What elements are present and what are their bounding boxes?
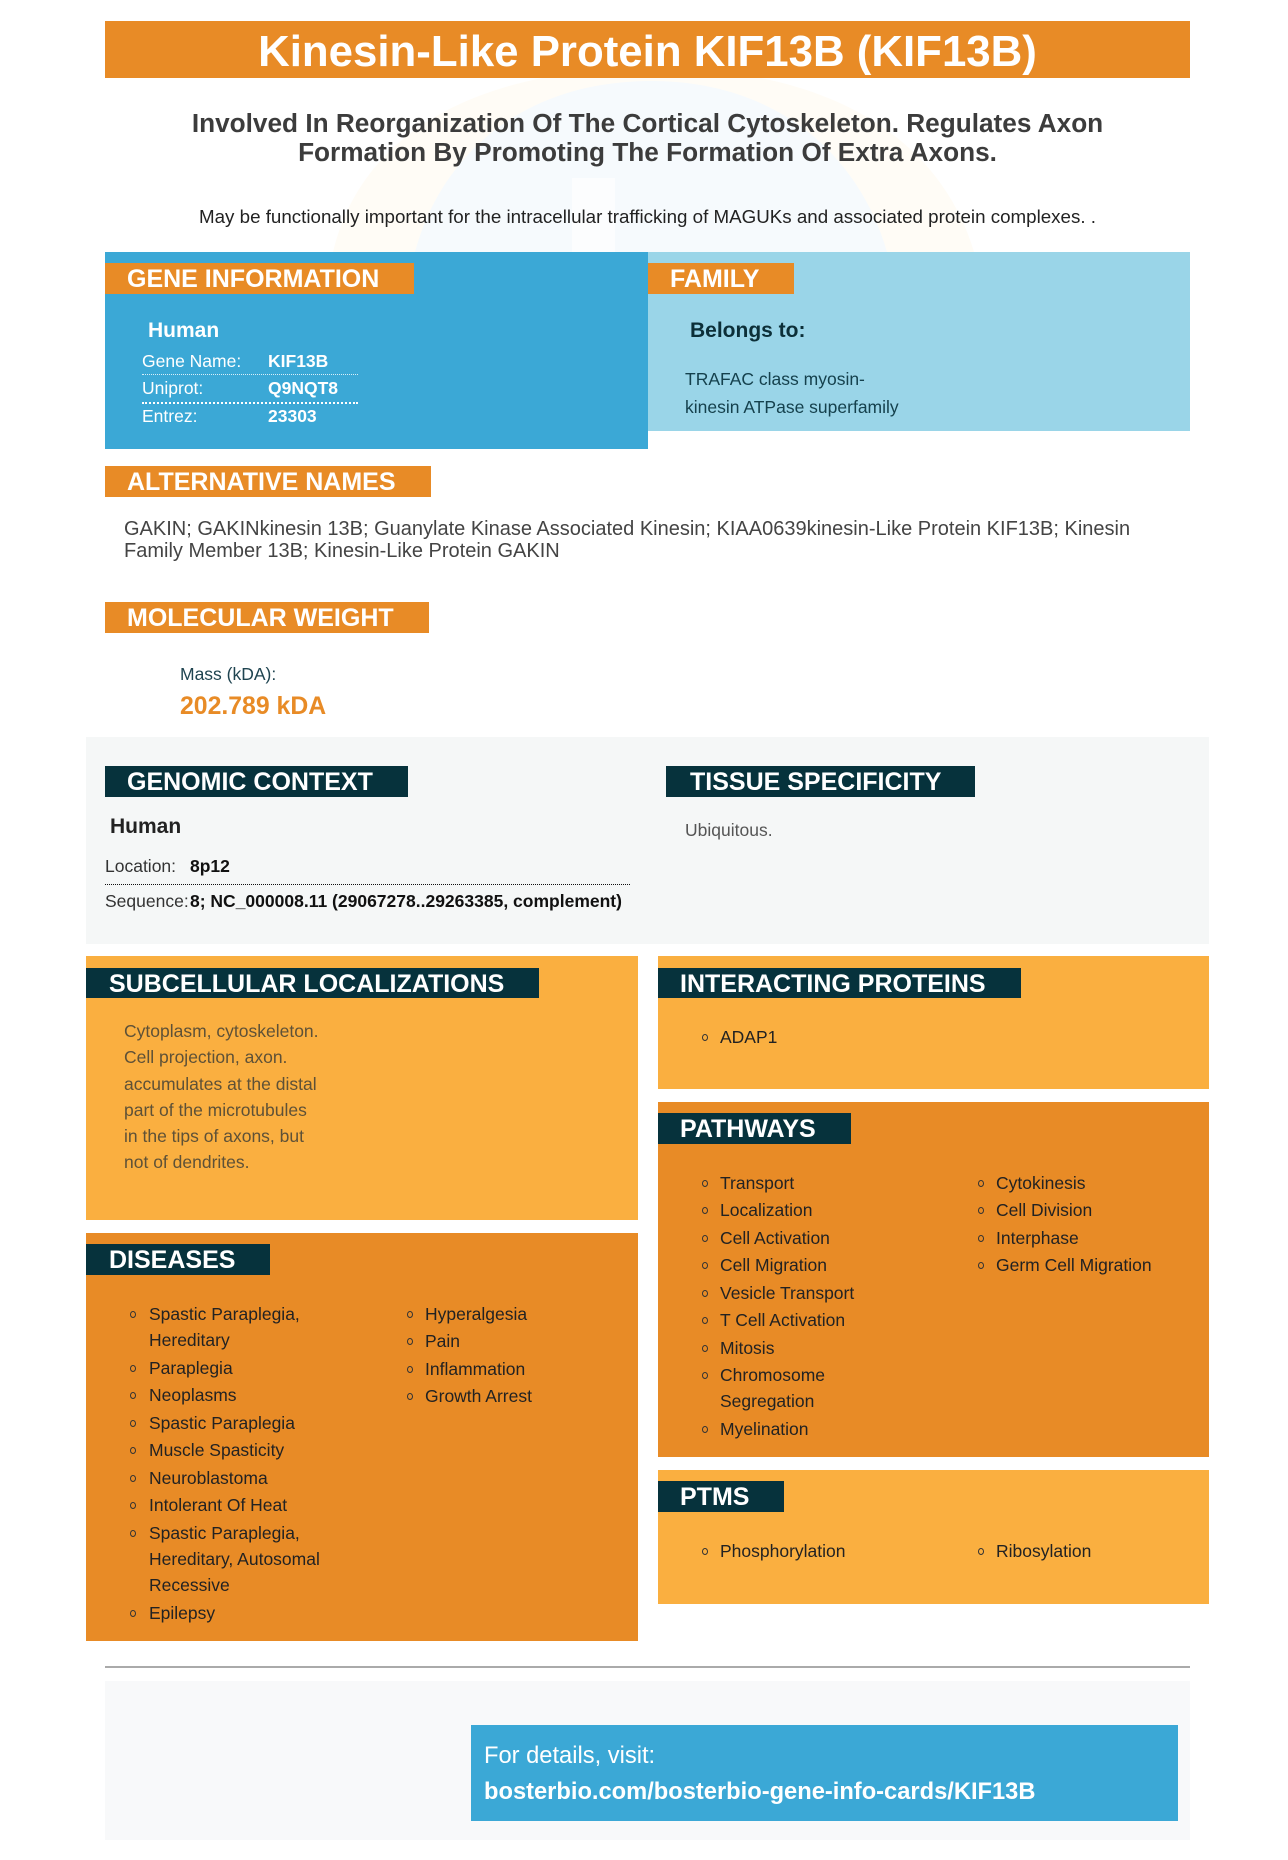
panel: family	[648, 252, 1190, 431]
heading: tissue specificity: TISSUE SPECIFICITY	[690, 768, 941, 796]
call to action text: bosterbio.com/bosterbio-gene-info-cards/KIF13B	[484, 1779, 1035, 1805]
heading: ptms: PTMS	[680, 1483, 749, 1511]
heading: gene information: GENE INFORMATION	[127, 265, 379, 293]
pathways list column 2: Cell Division	[996, 1200, 1092, 1220]
pathways list column 1: Cell Activation	[720, 1228, 830, 1248]
alternative names text: GAKIN; GAKINkinesin 13B; Guanylate Kinase Associated Kinesin; KIAA0639kinesin-Like Protein KIF13B; Kinesin	[124, 518, 1130, 540]
disease list column 1: Spastic Paraplegia,	[149, 1304, 300, 1324]
tissue specificity text: Ubiquitous.	[685, 820, 773, 840]
panel: interacting proteins	[658, 956, 1209, 1089]
localization text: part of the microtubules	[124, 1100, 307, 1120]
heading: family	[648, 263, 794, 294]
gene name row	[142, 351, 328, 371]
disease list column 1: Recessive	[149, 1575, 230, 1595]
panel: diseases: Growth Arrest	[425, 1386, 532, 1406]
disease list column 1	[130, 1304, 320, 1623]
uniprot row: Uniprot:	[142, 378, 203, 398]
mass label: Mass (kDA):	[180, 664, 276, 684]
pathways list column 1: Transport	[720, 1173, 794, 1193]
heading: alternative names: ALTERNATIVE NAMES	[127, 468, 396, 496]
disease list column 1: Paraplegia	[149, 1358, 233, 1378]
localization text	[124, 1021, 319, 1172]
disease list column 1: Intolerant Of Heat	[149, 1495, 287, 1515]
sequence row: Sequence:	[105, 891, 189, 911]
heading: ptms	[658, 1481, 784, 1512]
subtitle: Involved In Reorganization Of The Cortical Cytoskeleton. Regulates Axon	[192, 108, 1103, 138]
mass value: 202.789 kDA	[180, 693, 326, 720]
ptm list item 2: Ribosylation	[996, 1541, 1091, 1561]
disease list column 2: Hyperalgesia	[425, 1304, 527, 1324]
uniprot row: Q9NQT8	[268, 378, 338, 398]
pathways list column 1: Localization	[720, 1200, 812, 1220]
pathways list column 1: Cell Migration	[720, 1255, 827, 1275]
pathways list column 2	[978, 1173, 1152, 1275]
pathways list column 1	[702, 1173, 854, 1439]
watermark logo	[334, 78, 974, 252]
heading: family: FAMILY	[670, 265, 759, 293]
disease list column 1: Neuroblastoma	[149, 1468, 268, 1488]
gene name row: Gene Name:	[142, 351, 241, 371]
heading: pathways: PATHWAYS	[680, 1115, 816, 1143]
family text: TRAFAC class myosin-	[685, 369, 865, 389]
pathways list column 1: Segregation	[720, 1391, 814, 1411]
pathways list column 2: Interphase	[996, 1228, 1079, 1248]
title	[105, 21, 1190, 78]
call to action text	[484, 1743, 1035, 1805]
panel: genomic context and tissue specificity: 8p12	[190, 856, 230, 876]
localization text: not of dendrites.	[124, 1152, 250, 1172]
disease list column 1: Spastic Paraplegia	[149, 1413, 295, 1433]
heading: diseases	[86, 1244, 270, 1275]
ptm list item 1: Phosphorylation	[720, 1541, 846, 1561]
disease list column 2	[407, 1304, 532, 1406]
call to action box	[471, 1725, 1178, 1821]
uniprot row	[142, 378, 338, 398]
entrez row: Entrez:	[142, 406, 197, 426]
panel: pathways	[658, 1102, 1209, 1457]
panel: genomic context and tissue specificity	[86, 737, 1209, 944]
family text	[685, 369, 899, 417]
disease list column 1: Spastic Paraplegia,	[149, 1523, 300, 1543]
disease list column 1: Epilepsy	[149, 1603, 215, 1623]
subtitle: Formation By Promoting The Formation Of Extra Axons.	[298, 137, 997, 167]
disease list column 2: Inflammation	[425, 1359, 525, 1379]
species label: Human	[148, 319, 219, 342]
location row: Location:	[105, 856, 176, 876]
location row	[105, 856, 230, 876]
panel: pathways: Germ Cell Migration	[996, 1255, 1152, 1275]
entrez row	[142, 406, 317, 426]
heading: diseases: DISEASES	[109, 1246, 235, 1274]
heading: pathways	[658, 1113, 851, 1144]
description: May be functionally important for the intracellular trafficking of MAGUKs and associated protein complexes. .	[199, 206, 1096, 227]
heading: genomic context: GENOMIC CONTEXT	[127, 768, 373, 796]
disease list column 1: Muscle Spasticity	[149, 1440, 284, 1460]
panel: gene information	[105, 252, 648, 449]
pathways list column 2: Cytokinesis	[996, 1173, 1085, 1193]
heading: molecular weight: MOLECULAR WEIGHT	[127, 604, 394, 632]
list item: ADAP1	[720, 1027, 777, 1047]
localization text: Cell projection, axon.	[124, 1047, 287, 1067]
pathways list column 1: Myelination	[720, 1419, 809, 1439]
panel: diseases	[86, 1233, 638, 1641]
panel: subcellular localizations	[86, 956, 638, 1220]
subtitle	[192, 108, 1103, 167]
title: Kinesin-Like Protein KIF13B (KIF13B)	[258, 27, 1037, 76]
pathways list column 1: Chromosome	[720, 1365, 825, 1385]
heading: interacting proteins: INTERACTING PROTEINS	[680, 970, 986, 998]
pathways list column 1: Mitosis	[720, 1338, 774, 1358]
disease list column 1: Neoplasms	[149, 1385, 237, 1405]
footer panel	[105, 1681, 1190, 1840]
disease list column 1: Hereditary	[149, 1330, 230, 1350]
heading: subcellular localizations: SUBCELLULAR LOCALIZATIONS	[109, 970, 504, 998]
pathways list column 1: T Cell Activation	[720, 1310, 845, 1330]
localization text: in the tips of axons, but	[124, 1126, 304, 1146]
pathways list column 1: Vesicle Transport	[720, 1283, 854, 1303]
species label: Human	[110, 815, 181, 838]
localization text: Cytoplasm, cytoskeleton.	[124, 1021, 319, 1041]
disease list column 1: Hereditary, Autosomal	[149, 1549, 320, 1569]
gene name row: KIF13B	[268, 351, 328, 371]
disease list column 2: Pain	[425, 1331, 460, 1351]
alternative names text	[124, 518, 1130, 562]
belongs to label: Belongs to:	[690, 319, 806, 342]
panel: ptms	[658, 1470, 1209, 1604]
alternative names text: Family Member 13B; Kinesin-Like Protein GAKIN	[124, 540, 560, 562]
call to action text: For details, visit:	[484, 1743, 655, 1769]
family text: kinesin ATPase superfamily	[685, 397, 899, 417]
sequence row: 8; NC_000008.11 (29067278..29263385, complement)	[190, 891, 622, 911]
entrez row: 23303	[268, 406, 317, 426]
localization text: accumulates at the distal	[124, 1074, 317, 1094]
